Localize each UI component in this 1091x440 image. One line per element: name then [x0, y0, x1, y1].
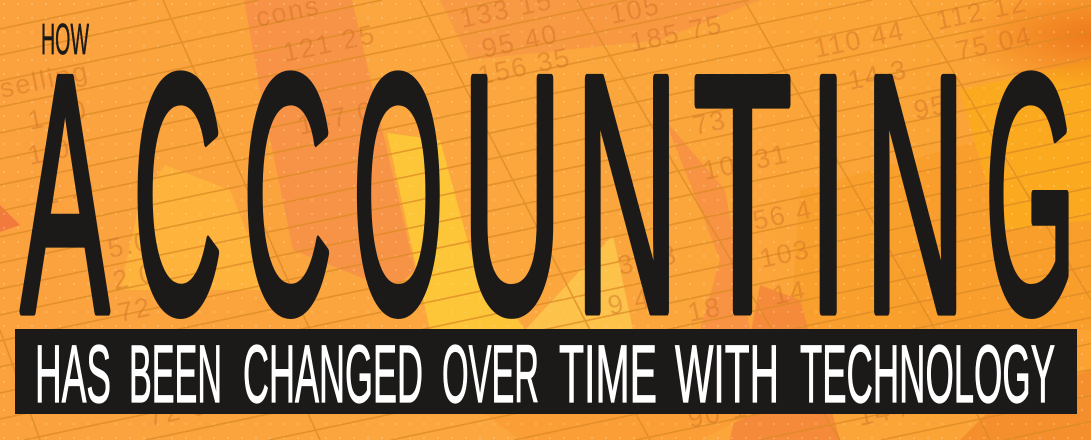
- banner text: [35, 329, 1055, 420]
- ledger figures: 5.0: [105, 225, 154, 264]
- ledger figures: 39 3: [615, 239, 680, 281]
- ledger figures: 147 0: [295, 95, 377, 141]
- ledger figures: 1 00: [25, 129, 90, 171]
- ledger figures: 56 4: [750, 194, 815, 236]
- main title: ACCOUNTING: N: [575, 6, 679, 384]
- ledger figures: 72: [115, 291, 155, 328]
- banner text: CHANGED: [243, 329, 423, 420]
- ledger figures: 110 44: [811, 15, 908, 64]
- ledger figures: 121 25: [280, 19, 379, 68]
- text: HOW: [41, 15, 89, 64]
- ledger figures: 1 95: [885, 89, 950, 131]
- main title: ACCOUNTING: C: [243, 5, 332, 383]
- banner background: [15, 329, 1077, 414]
- ledger figures: 14: [770, 274, 810, 311]
- main title: ACCOUNTING: O: [353, 5, 444, 383]
- ledger figures: 75 04: [953, 20, 1035, 66]
- banner text: OVER: [442, 329, 539, 420]
- ledger figures: 2 0: [110, 257, 159, 296]
- ledger figures: 95 40: [479, 18, 561, 64]
- main title: ACCOUNTING: G: [985, 5, 1076, 383]
- banner text: BEEN: [129, 329, 222, 420]
- banner text: WITH: [675, 329, 779, 420]
- ledger figures: 73 0: [690, 99, 755, 141]
- main title: ACCOUNTING: U: [462, 5, 562, 383]
- main title: ACCOUNTING: C: [133, 5, 222, 383]
- main title: ACCOUNTING: I: [808, 5, 848, 383]
- ledger figures: 14 3: [845, 54, 910, 96]
- ledger figures: 10 .31: [700, 138, 791, 186]
- main title: ACCOUNTING: T: [693, 6, 792, 384]
- ledger figures: 72 0: [145, 390, 210, 432]
- ledger figures: 144: [855, 392, 911, 432]
- banner text: TIME: [559, 329, 657, 420]
- banner text: HAS: [35, 329, 111, 420]
- ledger figures: 156 35: [475, 42, 574, 91]
- ledger figures: 9 40: [605, 279, 670, 321]
- ledger figures: 185 75: [627, 9, 726, 58]
- ledger figures: 103: [757, 234, 813, 274]
- ledger figures: 18: [685, 291, 725, 328]
- ledger figures: 1 00: [25, 94, 90, 136]
- main title: ACCOUNTING: N: [864, 5, 966, 383]
- ledger figures: 1 .0: [40, 170, 98, 211]
- subtitle banner: [15, 329, 1077, 420]
- main title: ACCOUNTING: A: [21, 7, 110, 383]
- ledger figures: 90 10: [685, 388, 767, 434]
